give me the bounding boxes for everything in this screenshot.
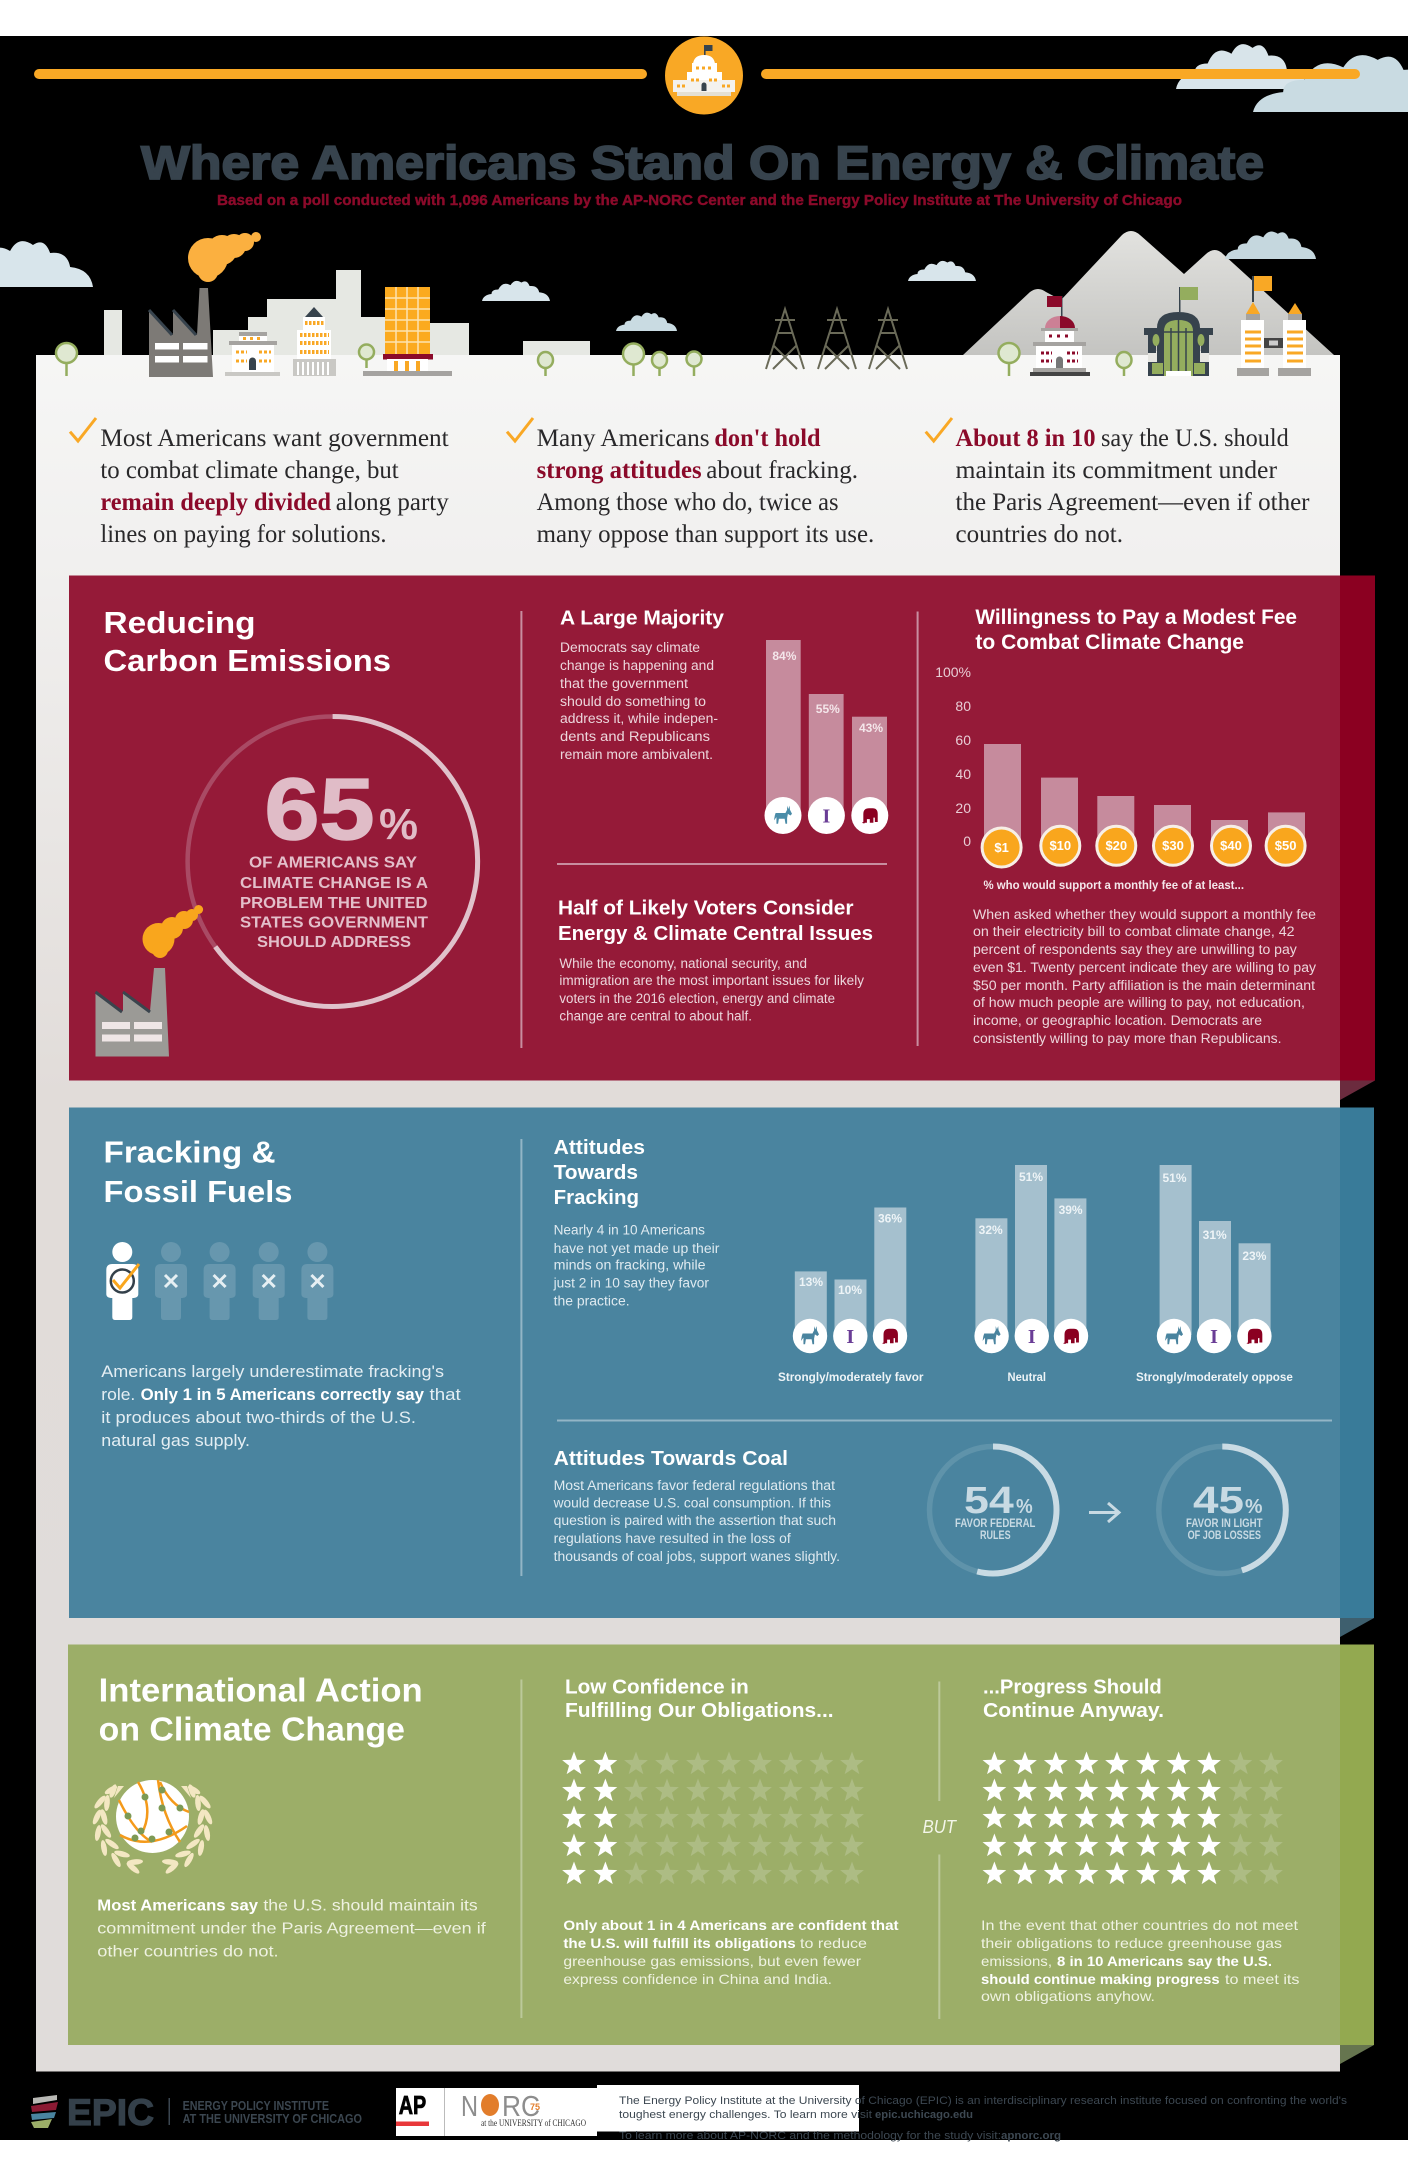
key finding 3 [926, 418, 1310, 548]
bar chart: neutral: I [1028, 1326, 1036, 1348]
key finding 2 [507, 418, 874, 548]
text: fracking underestimate: that [430, 1386, 461, 1404]
text: a large majority: change is happening and [560, 658, 714, 673]
text: attitudes towards coal: thousands of coal jobs, support wanes slightly. [554, 1549, 840, 1564]
footer: EPIC logo: ENERGY POLICY INSTITUTE [183, 2099, 329, 2113]
text: half of likely voters [558, 898, 873, 1024]
bar chart: party agreement [764, 640, 888, 834]
heading: progress should continue [983, 1676, 1164, 1722]
heading: reducing carbon emissions: Carbon Emissions [104, 643, 391, 678]
icon: factory with orange smoke [96, 905, 203, 1056]
footer: AP and NORC logos: N [461, 2091, 478, 2123]
chart: 54 percent ring: % [1016, 1496, 1033, 1518]
text: attitudes towards coal [553, 1448, 840, 1564]
chart: 65 percent ring: CLIMATE CHANGE IS A [240, 875, 428, 892]
text: fee explanation: on their electricity bill to combat climate change, 42 [973, 924, 1295, 939]
bar chart: neutral: 39% [1059, 1203, 1083, 1217]
text: half of likely voters: While the economy, national security, and [559, 956, 807, 971]
text: fee explanation: percent of respondents say they are unwilling to pay [973, 942, 1297, 957]
chart: 65 percent ring: % [379, 800, 418, 849]
text: a large majority: should do something to [560, 694, 706, 709]
chart: 45 percent ring: % [1245, 1496, 1263, 1518]
key finding 1: remain deeply divided [100, 489, 331, 516]
panel: fracking and fossil fuels [69, 1108, 1374, 1637]
bar chart: neutral: 51% [1019, 1170, 1043, 1184]
heading: fracking and fossil fuels [104, 1134, 292, 1209]
text: fracking underestimate: it produces about two-thirds of the U.S. [101, 1409, 416, 1427]
text: progress explanation: should continue making progress [981, 1971, 1220, 1987]
text: paris commitment: the U.S. should maintain its [263, 1898, 478, 1915]
key finding 1 [70, 418, 449, 548]
icon: EPIC stack [31, 2095, 58, 2128]
icon: globe and laurel wreath [91, 1780, 214, 1875]
heading: low confidence [565, 1676, 834, 1722]
text: fee explanation: income, or geographic location. Democrats are [973, 1013, 1262, 1028]
bar chart: strongly or moderately favor [778, 1208, 924, 1384]
icon: capitol medallion [665, 36, 743, 114]
footer: EPIC logo [31, 2092, 362, 2133]
text: paris commitment [97, 1898, 486, 1961]
icon: check [926, 418, 952, 441]
icon: correct person [106, 1242, 139, 1320]
bar chart: monthly fee: $50 [1275, 838, 1296, 853]
chart: 45 percent ring [1159, 1446, 1286, 1574]
bar chart: monthly fee: 0 [963, 833, 971, 849]
bar chart: neutral [974, 1165, 1088, 1384]
text: a large majority: remain more ambivalent. [560, 747, 713, 762]
bar chart: monthly fee: % who would support a monthly fee of at least... [984, 878, 1244, 892]
key finding 2: strong attitudes [537, 457, 702, 484]
text: attitudes towards fracking: Attitudes [554, 1137, 645, 1159]
text: progress explanation: In the event that other countries do not meet [981, 1917, 1298, 1933]
bar chart: monthly fee [935, 664, 1305, 892]
text: fee explanation: of how much people are willing to pay, not education, [973, 995, 1305, 1010]
footer: about text: apnorc.org [1001, 2130, 1061, 2142]
icon: white building 1 [225, 332, 280, 376]
chart: 65 percent ring: 65 [264, 761, 374, 858]
text: low confidence explanation [563, 1917, 899, 1987]
text: fee explanation: When asked whether they would support a monthly fee [973, 907, 1316, 922]
bar chart: strongly or moderately favor: 36% [878, 1212, 902, 1226]
text: attitudes towards coal: Most Americans favor federal regulations that [554, 1478, 835, 1493]
icons: one in five people [106, 1242, 333, 1320]
chart: 45 percent ring: 45 [1193, 1480, 1244, 1522]
bar chart: strongly or moderately oppose: 23% [1242, 1249, 1267, 1263]
text: progress explanation: 8 in 10 Americans say the U.S. [1057, 1953, 1272, 1969]
footer: about text: epic.uchicago.edu [875, 2109, 973, 2121]
text: low confidence explanation: to reduce [800, 1935, 867, 1951]
text: a large majority: that the government [560, 676, 688, 691]
icon: democrat [764, 797, 802, 834]
panel: reducing carbon emissions [69, 576, 1375, 1100]
heading: fracking and fossil fuels: Fossil Fuels [104, 1174, 292, 1209]
bar chart: monthly fee: $20 [1105, 838, 1127, 853]
icon: twin towers with orange flag [1237, 276, 1311, 376]
chart: 45 percent ring: OF JOB LOSSES [1188, 1530, 1261, 1542]
footer: EPIC logo: AT THE UNIVERSITY OF CHICAGO [183, 2112, 362, 2126]
heading: progress should continue: Continue Anyway. [983, 1700, 1164, 1722]
text: attitudes towards fracking: just 2 in 10 say they favor [553, 1276, 709, 1291]
bar chart: monthly fee: $40 [1220, 838, 1242, 853]
chart: 54 percent ring [930, 1446, 1057, 1574]
chart: 65 percent ring [188, 716, 478, 1006]
bar chart: neutral: 32% [979, 1223, 1003, 1237]
footer: about text: The Energy Policy Institute at the University of Chicago (EPIC) is an interdisciplinary research institute focused on confronting the world's [619, 2095, 1348, 2107]
text: paris commitment: commitment under the Paris Agreement—even if [97, 1921, 486, 1938]
text: paris commitment: Most Americans say [97, 1898, 258, 1915]
icon: red-domed building [1030, 296, 1090, 376]
text: attitudes towards coal: Attitudes Towards Coal [554, 1448, 788, 1470]
bar chart: strongly or moderately oppose: 31% [1203, 1228, 1227, 1242]
bar chart: monthly fee: $10 [1049, 838, 1071, 853]
chart: 54 percent ring: FAVOR FEDERAL [955, 1518, 1035, 1530]
icon: check [507, 418, 533, 441]
text: a large majority [560, 607, 725, 762]
key finding 3: About 8 in 10 [956, 425, 1096, 452]
icon: republican [851, 797, 888, 834]
icon: white tower building 2 [293, 307, 336, 376]
text: fee explanation: even $1. Twenty percent indicate they are willing to pay [973, 960, 1316, 975]
footer: AP and NORC logos: 75 [530, 2102, 540, 2112]
text: progress explanation: to meet its [1225, 1971, 1300, 1987]
bar chart: strongly or moderately oppose: I [1210, 1326, 1218, 1348]
clouds: skyline [0, 241, 976, 331]
key finding 1: along party [336, 489, 449, 516]
text: fee explanation: consistently willing to pay more than Republicans. [973, 1031, 1282, 1046]
heading: fracking and fossil fuels: Fracking & [104, 1134, 276, 1170]
text: progress explanation [981, 1917, 1300, 2004]
key finding 2: about fracking. [706, 457, 858, 484]
text: fracking underestimate: role. [101, 1386, 135, 1404]
text: attitudes towards fracking: Fracking [554, 1187, 639, 1209]
text: attitudes towards coal: regulations have resulted in the loss of [554, 1531, 791, 1546]
footer: AP and NORC logos: RC [502, 2091, 540, 2123]
text: paris commitment: other countries do not. [97, 1944, 279, 1961]
key finding 1: to combat climate change, but [100, 457, 399, 484]
text: low confidence explanation: Only about 1 in 4 Americans are confident that [563, 1917, 899, 1933]
text: fracking underestimate: Only 1 in 5 Americans correctly say [141, 1386, 425, 1404]
icons: trees [56, 343, 1132, 376]
bar chart: monthly fee: $30 [1162, 838, 1184, 853]
cloud: over mountains [1225, 231, 1316, 259]
text: a large majority: A Large Majority [560, 607, 725, 629]
bar chart: monthly fee: 100% [935, 664, 971, 680]
key finding 1: Most Americans want government [100, 425, 449, 452]
heading: willingness to pay: Willingness to Pay a Modest Fee [975, 606, 1297, 629]
star chart: low confidence [562, 1752, 864, 1884]
text: a large majority: address it, while indepen- [560, 711, 718, 726]
arrow [1089, 1503, 1119, 1522]
bar chart: party agreement: 84% [772, 649, 797, 663]
key finding 1: lines on paying for solutions. [100, 521, 387, 548]
icon: independent [808, 797, 845, 834]
cream panel [36, 355, 1340, 2072]
text: fee explanation [973, 907, 1316, 1046]
header bars [34, 69, 1360, 79]
icon: check [70, 418, 96, 441]
heading: low confidence: Low Confidence in [565, 1676, 749, 1698]
text: fracking underestimate [101, 1363, 461, 1450]
text: attitudes towards fracking [553, 1137, 720, 1308]
icon: orange tower [363, 287, 452, 376]
key finding 2: Among those who do, twice as [537, 489, 839, 516]
text: half of likely voters: change are central to about half. [559, 1009, 752, 1024]
bar chart: monthly fee: $1 [994, 840, 1009, 855]
text: attitudes towards fracking: minds on fracking, while [554, 1258, 706, 1273]
text: progress explanation: their obligations to reduce greenhouse gas [981, 1935, 1282, 1951]
icon: independent: I [823, 806, 831, 828]
key finding 2: don't hold [714, 425, 821, 452]
subtitle: Based on a poll conducted with 1,096 Americans by the AP-NORC Center and the Energy Policy Institute at The University of Chicago [217, 193, 1182, 209]
chart: 65 percent ring: OF AMERICANS SAY [249, 854, 418, 872]
title: Where Americans Stand On Energy & Climate [141, 136, 1264, 189]
text: half of likely voters: voters in the 2016 election, energy and climate [559, 991, 835, 1006]
bar chart: strongly or moderately oppose [1136, 1165, 1293, 1384]
cloud: top right pair [1176, 44, 1408, 112]
heading: international action: on Climate Change [99, 1711, 405, 1748]
bar chart: monthly fee: 80 [955, 698, 971, 714]
text: a large majority: Democrats say climate [560, 640, 700, 655]
text: attitudes towards fracking: the practice. [554, 1294, 630, 1308]
bar chart: monthly fee: 60 [955, 732, 971, 748]
heading: willingness to pay: to Combat Climate Change [975, 631, 1244, 654]
footer: EPIC logo: EPIC [67, 2092, 154, 2133]
key finding 3: say the U.S. should [1101, 425, 1289, 452]
chart: 65 percent ring: PROBLEM THE UNITED [240, 895, 428, 912]
footer: AP and NORC logos: AP [399, 2090, 426, 2120]
icon: left factory [149, 288, 213, 377]
chart: 54 percent ring: RULES [980, 1530, 1011, 1542]
chart: 45 percent ring: FAVOR IN LIGHT [1186, 1518, 1262, 1530]
dividers [521, 1680, 939, 2019]
key finding 2: Many Americans [537, 425, 710, 452]
but label: BUT [923, 1817, 958, 1837]
key finding 3: maintain its commitment under [956, 457, 1278, 484]
bar chart: strongly or moderately favor: 13% [799, 1275, 823, 1289]
bottom white band [0, 2140, 1408, 2176]
bar chart: monthly fee: 40 [955, 766, 971, 782]
text: a large majority: dents and Republicans [560, 729, 710, 744]
text: half of likely voters: Energy & Climate Central Issues [558, 923, 873, 945]
text: attitudes towards fracking: Towards [554, 1162, 638, 1184]
heading: low confidence: Fulfilling Our Obligations... [565, 1700, 834, 1722]
heading: progress should continue: ...Progress Should [983, 1676, 1162, 1698]
footer: about text: To learn more about AP-NORC and the methodology for the study visit: [619, 2130, 1001, 2142]
star chart: should continue [983, 1752, 1283, 1884]
bar chart: strongly or moderately favor: Strongly/moderately favor [778, 1370, 924, 1384]
text: attitudes towards coal: question is paired with the assertion that such [554, 1513, 836, 1528]
text: half of likely voters: immigration are the most important issues for likely [559, 973, 864, 988]
text: low confidence explanation: express confidence in China and India. [563, 1971, 832, 1987]
mountains [963, 231, 1334, 355]
text: attitudes towards coal: would decrease U.S. coal consumption. If this [553, 1496, 831, 1511]
heading: reducing carbon emissions [104, 605, 391, 678]
key finding 3: the Paris Agreement—even if other [956, 489, 1310, 516]
text: fracking underestimate: natural gas supply. [101, 1432, 250, 1450]
footer: about text [619, 2095, 1348, 2142]
text: attitudes towards fracking: Nearly 4 in 10 Americans [554, 1222, 705, 1238]
bar chart: strongly or moderately favor: I [846, 1326, 854, 1348]
heading: reducing carbon emissions: Reducing [104, 605, 256, 640]
text: fracking underestimate: Americans largely underestimate fracking's [101, 1363, 444, 1381]
bar chart: strongly or moderately favor: 10% [838, 1283, 862, 1297]
icon: factory smoke [188, 232, 261, 282]
key finding 3: countries do not. [956, 521, 1123, 548]
dividers [521, 1139, 1332, 1576]
bar chart: strongly or moderately oppose: 51% [1162, 1171, 1187, 1185]
chart: 65 percent ring: STATES GOVERNMENT [240, 914, 429, 932]
skyline: pale city silhouette [104, 270, 590, 355]
bar chart: strongly or moderately oppose: Strongly/moderately oppose [1136, 1370, 1293, 1384]
key finding 2: many oppose than support its use. [537, 521, 874, 548]
text: low confidence explanation: the U.S. will fulfill its obligations [563, 1935, 796, 1951]
bar chart: party agreement: 43% [859, 721, 883, 735]
dividers [521, 611, 918, 1048]
icon: green arched building [1144, 287, 1213, 376]
text: low confidence explanation: greenhouse gas emissions, but even fewer [563, 1953, 861, 1969]
icon: incorrect people [155, 1242, 333, 1320]
footer: about text: toughest energy challenges. To learn more visit [619, 2109, 872, 2121]
text: attitudes towards fracking: have not yet made up their [554, 1241, 720, 1256]
heading: international action: International Action [99, 1671, 423, 1708]
text: progress explanation: emissions, [981, 1953, 1052, 1969]
icons: power pylons [766, 309, 907, 369]
bar chart: neutral: Neutral [1008, 1370, 1046, 1384]
chart: 54 percent ring: 54 [964, 1480, 1014, 1522]
heading: willingness to pay [975, 606, 1297, 654]
text: fee explanation: $50 per month. Party affiliation is the main determinant [973, 978, 1315, 993]
panel: international action [68, 1644, 1374, 2064]
text: progress explanation: own obligations anyhow. [981, 1988, 1155, 2004]
footer: AP and NORC logos: at the UNIVERSITY of CHICAGO [481, 2118, 586, 2128]
text: half of likely voters: Half of Likely Voters Consider [558, 898, 854, 920]
bar chart: monthly fee: 20 [955, 800, 971, 816]
chart: 65 percent ring: SHOULD ADDRESS [257, 934, 411, 951]
heading: international action [99, 1671, 423, 1748]
footer: AP and NORC logos [396, 2085, 859, 2136]
bar chart: party agreement: 55% [816, 702, 840, 716]
